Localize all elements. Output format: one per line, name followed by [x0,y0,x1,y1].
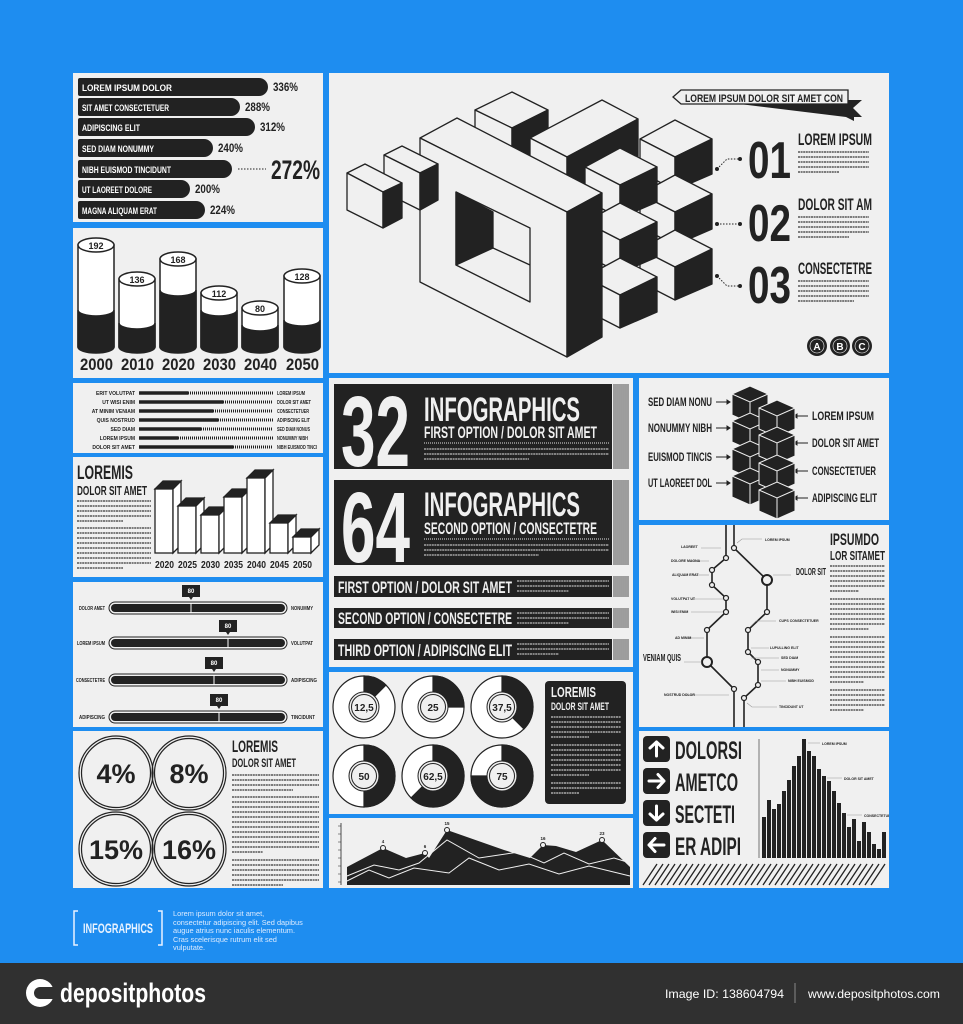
panel: metro line network: LAOREET [681,545,699,549]
panel: cylinder chart: 192 [88,241,104,251]
panel: metro line network: TINCIDUNT UT [779,705,804,709]
panel: horizontal bars: SED DIAM NONUMMY [82,144,154,155]
panel: percentage circles: 4% [96,759,136,789]
panel: horizontal bars: LOREM IPSUM DOLOR [82,83,172,94]
panel: donut charts: 12,5 [354,703,374,714]
panel: metro line network: ALIQUAM ERAT [672,573,699,577]
footer: description text: Lorem ipsum dolor sit amet, consectetur adipiscing elit. Sed dapibus augue atrius nunc iaculis elementum. Cras scelerisque rutrum elit sed vulputate. [173,909,303,952]
panel: percentage circles: 16% [162,835,216,865]
panel: sliders: ADIPISCING [291,678,317,684]
panel: cylinder chart: 112 [212,289,226,299]
panel: metro line network: SED DIAM [781,656,798,660]
panel: percentage circles: 15% [89,835,143,865]
panel: cylinder chart: 2010 [121,355,154,374]
panel: big number banners: SECOND OPTION / CONSECTETRE [338,609,512,628]
panel: big number banners: 64 [341,472,410,584]
numbered list: 02 [748,195,791,253]
panel: horizontal bars: UT LAOREET DOLORE [82,185,152,196]
ABC badges [807,336,872,356]
footer: infographics label [73,910,163,946]
panel: thin progress bars [73,383,323,453]
panel: big number banners: THIRD OPTION / ADIPISCING ELIT [338,641,512,660]
panel: donut charts [329,672,633,814]
panel: horizontal bars: ADIPISCING ELIT [82,123,140,134]
panel: mountain area chart: 16 [540,836,546,841]
panel: 3d bar chart: DOLOR SIT AMET [77,483,147,498]
panel: horizontal bars: SIT AMET CONSECTETUER [82,103,169,114]
panel: metro line network: LOREM IPSUM [765,538,790,542]
panel: 3d bar chart: LOREMIS [77,463,133,484]
panel: sliders: TINCIDUNT [291,715,316,721]
panel: metro line network: WISI ENIM [671,610,688,614]
panel: thin progress bars: NONUMMY NIBH [277,436,308,442]
panel: cube stack labels: NONUMMY NIBH [648,421,712,435]
footer: watermark bar [0,963,963,1024]
panel: cylinder chart: 2030 [203,355,236,374]
panel: 3d bar chart [73,457,323,577]
panel: sliders: 80 [211,661,218,667]
panel: arrows and histogram: SECTETI [675,801,735,829]
long bar [530,100,638,227]
panel: percentage circles: 8% [169,759,209,789]
panel: metro line network [639,525,889,727]
panel: horizontal bars: 336% [273,80,298,94]
ribbon title: LOREM IPSUM DOLOR SIT AMET CON [685,93,843,105]
top cube [475,92,548,165]
panel: cylinder chart [73,228,323,378]
panel: mountain area chart: 6 [424,844,427,849]
panel: arrows and histogram [639,731,889,888]
panel: cylinder chart: 2040 [244,355,277,374]
panel: metro line network: AD MINIM [675,636,691,640]
panel: thin progress bars: QUIS NOSTRUD [97,418,135,424]
panel: metro line network: NOSTRUD DOLOR [664,693,695,697]
ABC badges: B [836,342,844,353]
panel: 3d bar chart: 2050 [293,560,312,571]
panel: cube stack labels [639,378,889,520]
panel: sliders: 80 [188,589,195,595]
panel: donut charts: 50 [358,772,370,783]
panel: percentage circles: LOREMIS [232,737,278,756]
panel: thin progress bars: ERIT VOLUTPAT [96,391,135,397]
ABC badges: C [858,342,866,353]
panel: thin progress bars: SED DIAM [111,427,135,433]
panel: thin progress bars: LOREM IPSUM [100,436,135,442]
numbered list: 03 [748,257,791,315]
panel: 3d bar chart: 2035 [224,560,243,571]
panel: mountain area chart: 4 [382,839,385,844]
panel: cylinder chart: 2020 [162,355,195,374]
panel: mountain area chart: 15 [444,821,450,826]
panel: sliders: 80 [216,698,223,704]
panel: sliders: 80 [225,624,232,630]
panel: horizontal bars: 240% [218,141,243,155]
panel: cylinder chart: 136 [129,275,145,285]
panel: cube stack labels: EUISMOD TINCIS [648,450,712,464]
logo icon [26,979,54,1007]
panel: thin progress bars: LOREM IPSUM [277,391,305,397]
panel: sliders: LOREM IPSUM [77,641,105,647]
panel: 3d bar chart: 2030 [201,560,220,571]
panel: horizontal bars: 312% [260,120,285,134]
panel: big number banners: FIRST OPTION / DOLOR SIT AMET [338,578,512,597]
ribbon title [673,90,862,121]
panel: cylinder chart: 2000 [80,355,113,374]
panel: percentage circles [73,731,323,888]
panel: cylinder chart: 128 [294,272,310,282]
panel: thin progress bars: CONSECTETUER [277,409,309,415]
panel: donut charts: 62,5 [423,772,443,783]
panel: thin progress bars: DOLOR SIT AMET [92,445,135,451]
panel: arrows and histogram: AMETCO [675,769,738,797]
panel: cylinder chart: 80 [255,304,265,314]
panel: thin progress bars: ADIPISCING ELIT [277,418,310,424]
panel: metro line network: VENIAM QUIS [643,653,681,664]
panel: arrows and histogram: DOLOR SIT AMET [844,777,875,781]
panel: thin progress bars: UT WISI ENIM [102,400,135,406]
panel: cube stack labels: UT LAOREET DOL [648,476,712,490]
panel: 3d bar chart: 2045 [270,560,289,571]
panel: sliders: DOLOR AMET [79,606,105,612]
panel: big number banners: 32 [341,378,410,488]
panel: thin progress bars: DOLOR SIT AMET [277,400,311,406]
panel: donut charts: 37,5 [492,703,512,714]
panel: donut charts: LOREMIS [551,684,596,701]
panel: thin progress bars: SED DIAM NONUS [277,427,310,433]
panel: arrows and histogram: DOLORSI [675,737,742,765]
panel: 3d bar chart: 2020 [155,560,174,571]
panel: 3d bar chart: 2025 [178,560,197,571]
panel: arrows and histogram: ER ADIPI [675,833,741,861]
panel: metro line network: NONUMMY [781,668,800,672]
panel: mountain area chart: 23 [599,831,605,836]
panel: 3d bar chart: 2040 [247,560,266,571]
panel: sliders: ADIPISCING [79,715,105,721]
right cube grid [585,120,712,328]
numbered list [715,130,872,315]
panel: donut charts: 75 [496,772,508,783]
panel: sliders: VOLUTPAT [291,641,313,647]
panel: sliders: NONUMMY [291,606,313,612]
panel: metro line network: VOLUTPAT UT [671,597,696,601]
numbered list: 01 [748,132,791,190]
panel: sliders: CONSECTETRE [76,678,105,684]
panel: metro line network: CUPS CONSECTETUER [779,619,819,623]
panel: donut charts: 25 [427,703,439,714]
panel: big number banners [329,378,633,667]
panel: cylinder chart: 2050 [286,355,319,374]
main frame [420,118,602,357]
panel: horizontal bars [73,73,323,222]
panel: metro line network: DOLOR SIT [796,567,826,578]
panel: horizontal bars: NIBH EUISMOD TINCIDUNT [82,165,171,176]
panel: horizontal bars: 224% [210,203,235,217]
panel: metro line network: NIBH EUISMOD [788,679,814,683]
panel: thin progress bars: AT MINIM VENIAM [92,409,135,415]
ABC badges: A [813,342,821,353]
panel: mountain area chart [329,818,633,888]
panel: metro line network: LUPULLING ELIT [770,646,799,650]
panel: cube stack labels: SED DIAM NONU [648,395,712,409]
panel: horizontal bars: MAGNA ALIQUAM ERAT [82,206,157,217]
small cubes [347,146,438,228]
panel: arrows and histogram: LOREM IPSUM [822,742,847,746]
panel: metro line network: DOLORE MAGNA [671,559,701,563]
footer: watermark bar: depositphotos [60,978,206,1008]
footer: watermark bar: Image ID: 138604794 [665,987,784,1001]
panel: isometric cubes hero [329,73,889,373]
footer: watermark bar: www.depositphotos.com [807,987,940,1001]
panel: horizontal bars: 288% [245,100,270,114]
panel: horizontal bars: 200% [195,182,220,196]
panel: cylinder chart: 168 [170,255,186,265]
panel: sliders [73,582,323,727]
